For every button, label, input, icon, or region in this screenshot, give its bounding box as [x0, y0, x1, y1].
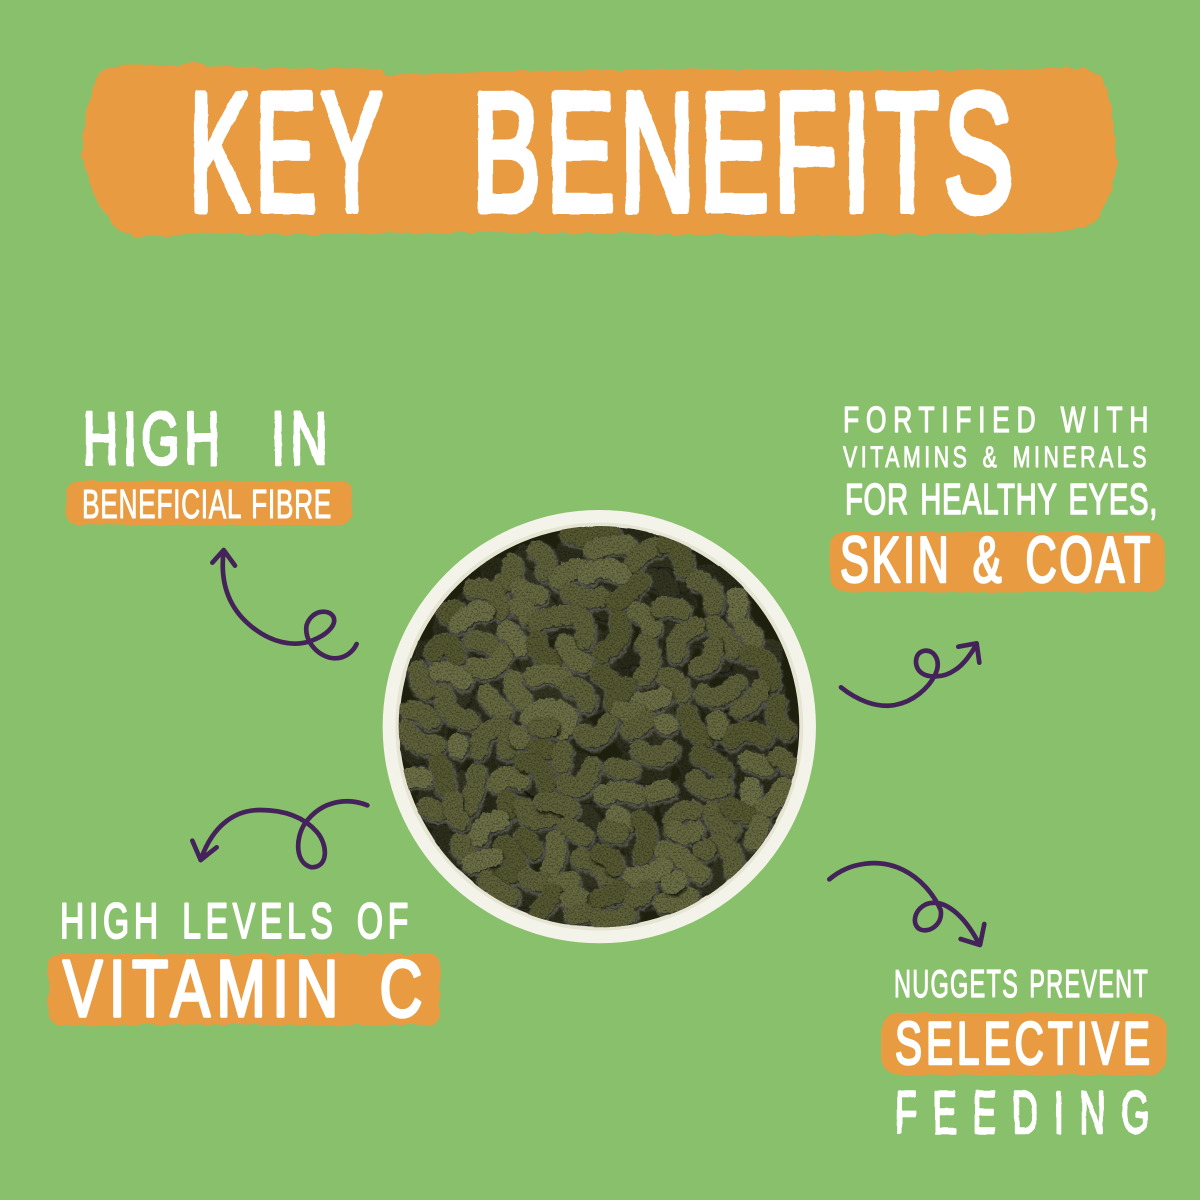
callout: vitamin c: [48, 893, 440, 1033]
label pill: [830, 532, 1165, 592]
callout: high in beneficial fibre: [66, 397, 352, 527]
arrow: bottom left: [192, 801, 367, 867]
heading: high in: HIGH: [83, 397, 225, 480]
bowl cavity: [399, 527, 799, 927]
label pill: [48, 954, 440, 1025]
arrow: top left: [212, 550, 357, 658]
nuggets: [398, 526, 798, 928]
arrow: top right: [841, 643, 979, 706]
callout: fortified with vitamins: [830, 399, 1165, 596]
title banner: [82, 58, 1118, 246]
upper nugget layer: [407, 532, 790, 919]
heading: high in: IN: [271, 397, 333, 480]
bowl of nuggets: [382, 510, 816, 944]
label pill: [881, 1013, 1167, 1075]
bowl rim: [383, 510, 816, 943]
banner brush stroke: [82, 61, 1118, 238]
label: vitamin c: VITAMIN C: [63, 944, 429, 1033]
arrow: bottom right: [829, 863, 984, 945]
callout: nuggets prevent selective feeding: [881, 963, 1167, 1146]
label: beneficial fibre: BENEFICIAL FIBRE: [82, 481, 332, 527]
bowl inner shadow: [395, 523, 803, 931]
title: key benefits: KEY: [189, 58, 387, 246]
title: key benefits: [189, 58, 1018, 246]
label pill: [66, 481, 352, 525]
lower nugget layer: [398, 528, 789, 928]
text: high levels of: HIGH LEVELS OF: [60, 893, 413, 949]
